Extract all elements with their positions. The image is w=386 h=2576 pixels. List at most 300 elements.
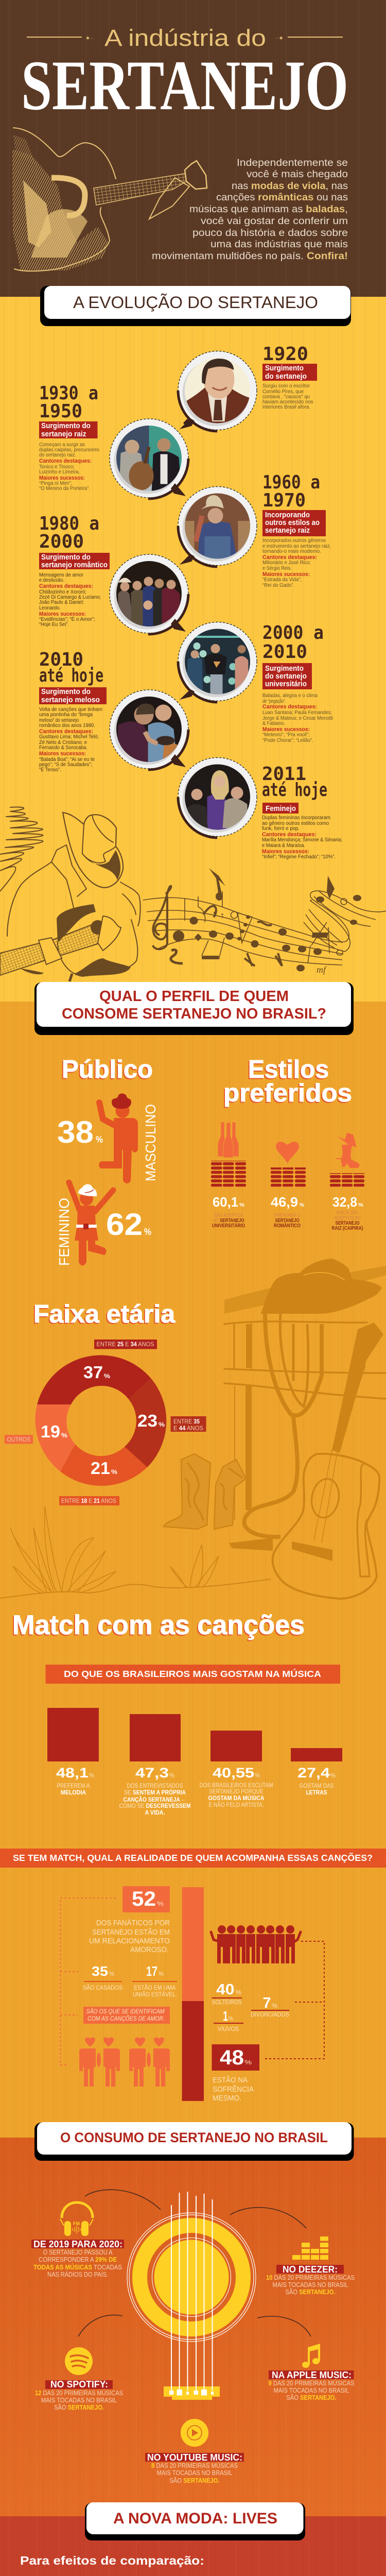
stat: 60,1%: SÃO ADEPTOS	[214, 1213, 243, 1218]
chart: stack 46,9	[271, 1167, 306, 1187]
text: 2010 até hoje: até hoje	[39, 665, 103, 686]
text: estão na sofrência: ESTÃO NA	[213, 2076, 248, 2084]
stat: 48,1%: %	[89, 1773, 94, 1779]
stat: 17%: ESTÃO EM UMA	[134, 1985, 176, 1991]
text: 1960 a 1970: outros estilos ao	[265, 519, 320, 527]
heading: a evolução do sertanejo	[40, 286, 351, 326]
heading: público: Público	[62, 1056, 153, 1083]
stat: 48,1%: PREFEREM A	[57, 1783, 90, 1789]
text: 1960 a 1970: 1960 a	[262, 472, 320, 493]
stat: 35%: SÃO CASADOS	[83, 1985, 122, 1991]
stat: 60,1%: 60,1	[213, 1194, 238, 1210]
block: rádios: CORRESPONDER A 29% DE	[39, 2256, 117, 2263]
arrow 4	[148, 594, 188, 634]
text: 2010 até hoje: “Balada Boa”; “Ai se eu te	[39, 757, 95, 762]
heading: estilos preferidos: preferidos	[222, 1080, 351, 1108]
intro text: movimentam multidões no país. Confira!	[152, 251, 348, 262]
text: 2010 até hoje	[39, 649, 107, 773]
intro text: canções românticas ou nas	[216, 192, 348, 203]
text: 1960 a 1970: Milionário e José Rico;	[262, 560, 311, 566]
chart: vertical split bar	[182, 1887, 204, 2101]
heading: faixa etária: Faixa etária	[33, 1300, 176, 1328]
text: 2010 até hoje: Volta de canções que tinham	[39, 707, 102, 713]
stat: 27,4%	[297, 1765, 336, 1796]
block: youtube music: SÃO SERTANEJO.	[170, 2477, 219, 2484]
heading: a evolução do sertanejo: A EVOLUÇÃO DO SERTANEJO	[73, 293, 318, 312]
stat: 1%: %	[229, 2016, 233, 2022]
block: spotify	[35, 2379, 123, 2411]
stat: 46,9%: SERTANEJO	[275, 1218, 300, 1224]
text: 2000 a 2010: universitário	[265, 680, 307, 688]
text: dos fanáticos: AMOROSO.	[130, 1945, 169, 1954]
heading: estilos preferidos	[222, 1056, 352, 1108]
stat: 47,3%: A VIDA.	[145, 1810, 165, 1816]
block: spotify: NO SPOTIFY:	[50, 2379, 108, 2389]
stat: 40,55%: 40,55	[213, 1765, 254, 1781]
text: 1980 a 2000: Leonardo.	[39, 605, 61, 611]
stat: 60,1%	[212, 1194, 245, 1229]
timeline circle 2000	[178, 622, 257, 701]
stat: 40,55%: SERTANEJO PORQUE	[209, 1789, 264, 1795]
stat: 47,3%: COMO SE DESCREVESSEM	[119, 1803, 190, 1809]
tag: outros: OUTROS	[7, 1437, 30, 1443]
text: 1960 a 1970: sertanejo raiz	[265, 527, 310, 535]
intro text	[152, 158, 348, 262]
text: 1920: Cornélio Pires, que	[262, 389, 304, 395]
stat: 60,1%: AO SERTANEJO	[213, 1218, 244, 1224]
text: 1930 a 1950: duplas caipiras, precursores	[39, 447, 99, 453]
stat: 60,1%: %	[239, 1202, 244, 1208]
subheading: para efeitos: Para efeitos de comparação:	[20, 2554, 204, 2567]
text: 1980 a 2000: Mensagens de amor	[39, 572, 84, 578]
heading: o consumo: O CONSUMO DE SERTANEJO NO BRASIL	[60, 2130, 328, 2145]
stat: 27,4%: %	[330, 1773, 336, 1779]
icon: apple music note	[302, 2344, 320, 2368]
intro text: músicas que animam as baladas ,	[189, 204, 348, 215]
text: 1980 a 2000: Maiores sucessos:	[39, 611, 86, 617]
text: 1930 a 1950: Começam a surgir as	[39, 442, 85, 448]
stat: 32,8%: RAIZ (CAIPIRA)	[331, 1226, 363, 1231]
stat: 1%	[214, 2008, 243, 2032]
stat: 32,8%: AINDA SÃO	[336, 1210, 359, 1216]
text: 1960 a 1970: Incorporando	[265, 511, 310, 519]
stat: 47,3%: 47,3	[135, 1765, 169, 1781]
stat: 47,3%	[119, 1765, 190, 1816]
icon: boot and hat	[336, 1133, 359, 1168]
text: dos fanáticos: DOS FANÁTICOS POR	[96, 1919, 170, 1927]
text: 1960 a 1970: Cantores destaques:	[262, 554, 317, 561]
stat: 52%: %	[157, 1901, 164, 1907]
text: 1980 a 2000: Chitãozinho e Xororó;	[39, 589, 86, 595]
heading: estilos preferidos: preferidos	[223, 1079, 352, 1107]
text: 1960 a 1970: tornando-o mais moderno.	[262, 549, 321, 554]
text: 2000 a 2010: Surgimento	[265, 665, 304, 673]
background illustration: hat, fence, rope, boots and guitar	[0, 1259, 386, 1599]
text: 1960 a 1970: “Rei do Gado”.	[262, 583, 294, 588]
chart: stack 32,8	[330, 1173, 364, 1187]
text: 2000 a 2010: 2000 a	[262, 622, 324, 643]
title: a indústria do: A indústria do	[104, 25, 266, 51]
text: 1920: do sertanejo	[265, 372, 307, 381]
block: deezer: MAIS TOCADAS NO BRASIL	[273, 2281, 348, 2289]
text: 2010 até hoje: pego”; “S de Saudades”;	[39, 762, 92, 768]
arrow 5	[178, 662, 217, 702]
arrow 3	[178, 526, 217, 567]
block: apple music	[269, 2370, 354, 2401]
text: 1920: Surgimento	[265, 364, 304, 372]
text: 2010 até hoje: Fernando & Sorocaba.	[39, 745, 87, 751]
stat: 1%: VIÚVOS	[218, 2026, 239, 2032]
stat: 38%: %	[96, 1134, 103, 1145]
text: 1960 a 1970	[262, 472, 331, 588]
stat: 47,3%: SE SENTEM A PRÓPRIA	[124, 1789, 186, 1796]
text: 2000 a 2010: “Pode Chorar”; “Leilão”.	[262, 738, 313, 743]
block: deezer: SÃO SERTANEJO.	[285, 2288, 336, 2296]
heading: match com as canções: Match com as canções	[12, 1610, 305, 1640]
text: 1960 a 1970: Incorporados outros gêneros	[262, 538, 326, 544]
text: 1980 a 2000: sertanejo romântico	[41, 561, 108, 569]
text: 1930 a 1950: Tonico e Tinoco;	[39, 464, 75, 470]
text: 2011 até hoje	[262, 764, 342, 860]
dashed connector left	[60, 1898, 116, 2065]
text: 2010 até hoje: Surgimento do	[41, 688, 91, 696]
block: rádios	[31, 2239, 124, 2278]
stat: 46,9%: ROMÂNTICO	[274, 1223, 301, 1229]
text: 2011 até hoje: Maiores sucessos:	[262, 849, 309, 855]
stat: 27,4%: LETRAS	[306, 1790, 327, 1796]
block: rádios: O SERTANEJO PASSOU A	[43, 2248, 113, 2256]
stat: 27,4%: GOSTAM DAS	[300, 1783, 334, 1789]
heading: a nova moda	[85, 2502, 305, 2540]
stat: 47,3%: CANÇÃO SERTANEJA –	[124, 1797, 185, 1803]
heading: match com as canções: Match com as canções	[11, 1611, 304, 1641]
stat: 40%: 40	[216, 1981, 235, 1998]
text: 2000 a 2010: Jorge & Mateus; e Cesar Menotti	[262, 716, 333, 721]
timeline circle 1980	[110, 554, 188, 633]
text: 1980 a 2000	[39, 513, 110, 628]
stat: 48%	[212, 2044, 259, 2071]
stat: 46,9%	[271, 1194, 304, 1229]
intro text: você vai gostar de conferir um	[201, 216, 348, 227]
stat: 60,1%: UNIVERSITÁRIO	[212, 1223, 245, 1229]
text: 1980 a 2000: Zezé Di Camargo & Luciano;	[39, 595, 101, 600]
icon: headphones: FM	[73, 2221, 80, 2226]
chart: age donut: 19	[41, 1422, 60, 1441]
intro text: Independentemente se	[237, 158, 348, 168]
banner: do que os brasileiros: DO QUE OS BRASILEIROS MAIS GOSTAM NA MÚSICA	[64, 1668, 321, 1679]
arrow 6	[148, 730, 188, 770]
stat: 48,1%: 48,1	[56, 1765, 89, 1781]
heading: estilos preferidos: Estilos	[247, 1057, 328, 1084]
timeline circle 2010	[110, 690, 188, 769]
title: a indústria do: ··★	[275, 36, 284, 41]
text: 1930 a 1950: Surgimento do	[41, 422, 91, 430]
text: estão na sofrência	[213, 2076, 254, 2103]
block: spotify: MAIS TOCADAS NO BRASIL	[41, 2396, 117, 2404]
icon: deezer bars	[292, 2236, 328, 2260]
text: 2010 até hoje: meloso” do sertanejo	[39, 718, 79, 723]
intro text: pouco da história e dados sobre	[192, 228, 348, 239]
block: youtube music	[145, 2452, 244, 2484]
text: 2000 a 2010: Baladas, alegria e o clima	[262, 693, 318, 699]
text: 1920: contava , "causos" qu	[262, 394, 310, 400]
block: deezer	[266, 2264, 355, 2296]
stat: 46,9%: %	[300, 1202, 304, 1208]
block: rádios: DE 2019 PARA 2020:	[33, 2239, 122, 2249]
label: feminino: FEMININO	[56, 1198, 72, 1266]
stat: 7%: 7	[262, 1995, 271, 2011]
text: 1930 a 1950: 1950	[39, 401, 82, 422]
text: 1980 a 2000: “Evidências”; “É o Amor”;	[39, 617, 95, 622]
icon: music staff and notes: mf	[317, 964, 327, 975]
stat: 17%: UNIÃO ESTÁVEL.	[133, 1991, 177, 1998]
block: youtube music: 8 DAS 20 PRIMEIRAS MÚSICAS	[151, 2462, 238, 2469]
text: 2011 até hoje: e Maiara & Maraísa.	[262, 843, 305, 849]
stat: 47,3%: %	[169, 1773, 174, 1779]
title: a indústria do	[27, 25, 343, 51]
stat: 40,55%: GOSTAM DA MÚSICA	[208, 1795, 265, 1802]
text: 1960 a 1970: e instrumento ao sertanejo raiz,	[262, 544, 331, 549]
text: 1980 a 2000: e desilusão.	[39, 578, 64, 583]
block: apple music: SÃO SERTANEJO.	[286, 2394, 337, 2401]
block: apple music: NA APPLE MUSIC:	[272, 2370, 352, 2380]
dashed connector right	[263, 1941, 324, 2059]
text: 2000 a 2010: Maiores sucessos:	[262, 726, 310, 733]
text: 2011 até hoje: Duplas femininas Incorporaram	[262, 815, 330, 821]
heading: perfil	[34, 982, 354, 1035]
stat: 40,55%: DOS BRASILEIROS ESCUTAM	[200, 1783, 273, 1789]
text: 2011 até hoje: ao gênero outros estilos como	[262, 821, 329, 826]
text: 1920: haviam acontecido nos	[262, 399, 313, 405]
text: 1930 a 1950: 1930 a	[39, 383, 98, 404]
stat: 40,55%	[200, 1765, 273, 1808]
banner: do que os brasileiros	[45, 1665, 340, 1684]
text: 2010 até hoje: Gusttavo Lima; Michel Teló;	[39, 734, 99, 740]
text: estão na sofrência: SOFRÊNCIA	[213, 2085, 254, 2094]
chart: stack 60,1	[211, 1161, 246, 1187]
text: 1960 a 1970: e Sérgio Reis.	[262, 566, 292, 571]
stat: 35%	[83, 1963, 122, 1991]
stat: 17%	[132, 1963, 177, 1998]
icon: spotify	[65, 2347, 93, 2375]
tag: outros	[5, 1435, 33, 1444]
chart: age donut: 21	[91, 1459, 110, 1478]
stat: 32,8%: %	[358, 1202, 363, 1208]
text: dos fanáticos	[89, 1919, 170, 1954]
tag: 18 a 21	[59, 1496, 119, 1505]
block: deezer: 10 DAS 20 PRIMEIRAS MÚSICAS	[266, 2274, 355, 2281]
text: 1980 a 2000: Cantores destaques:	[39, 583, 93, 589]
icon: man	[99, 1093, 138, 1183]
stat: 32,8%: 32,8	[332, 1194, 357, 1210]
text: estão na sofrência: MESMO.	[213, 2094, 241, 2103]
text: 1930 a 1950: Luizinho e Limeira.	[39, 469, 80, 475]
stat: 48%: 48	[220, 2046, 244, 2069]
text: dos fanáticos: SERTANEJO ESTÃO EM	[92, 1928, 170, 1937]
stat: 38%: 38	[57, 1115, 94, 1149]
timeline circle 1920	[178, 351, 257, 430]
stat: 62%: %	[144, 1227, 151, 1237]
title: a indústria do: ★··	[85, 36, 94, 41]
text: 2010 até hoje: 2010	[39, 649, 83, 670]
stat: 7%: %	[272, 2003, 277, 2009]
stat: 17%: %	[159, 1971, 164, 1977]
label: masculino: MASCULINO	[143, 1104, 159, 1181]
stat: 7%: DIVORCIADOS	[251, 2012, 289, 2018]
text: 2011 até hoje: 2011	[262, 764, 306, 785]
stat: 62%: 62	[106, 1207, 143, 1242]
stat: 32,8%: ADEPTOS AO	[335, 1215, 361, 1221]
icon: couples with hearts	[79, 2038, 170, 2087]
stat: 52%: 52	[132, 1888, 156, 1910]
text: 2000 a 2010: & Fabiano.	[262, 721, 285, 726]
text: 2000 a 2010: Cantores destaques:	[262, 704, 317, 710]
text: 2000 a 2010	[262, 622, 333, 743]
text: 2011 até hoje: até hoje	[262, 779, 327, 801]
chart: age donut: %	[61, 1432, 67, 1439]
text: 2011 até hoje: Marília Mendonça; Simone & Simaria;	[262, 837, 342, 843]
heading: perfil: QUAL O PERFIL DE QUEM	[99, 988, 289, 1005]
tag: 35 a 44	[171, 1416, 206, 1432]
text: 2000 a 2010: do sertanejo	[265, 672, 307, 681]
text: 2010 até hoje: romântico dos anos 1980.	[39, 723, 95, 728]
text: 1980 a 2000: 2000	[39, 531, 84, 552]
block: spotify: SÃO SERTANEJO.	[54, 2403, 104, 2411]
chart: age donut: %	[104, 1372, 110, 1380]
text: 1920: Surgiu com o escritor	[262, 383, 310, 389]
text: 1920: interiores Brasil afora.	[262, 404, 310, 410]
icon: group of people	[211, 1925, 301, 1963]
text: 2010 até hoje: sertanejo meloso	[41, 696, 100, 704]
chart: bars	[47, 1708, 342, 1761]
text: 2000 a 2010: Luan Santana; Paula Fernandes;	[262, 710, 332, 716]
block: rádios: TODAS AS MÚSICAS TOCADAS	[33, 2263, 122, 2271]
stat: 48,1%	[56, 1765, 94, 1796]
stat: 40%	[212, 1981, 242, 2006]
chart: age donut: %	[159, 1421, 165, 1428]
text: 1930 a 1950	[39, 383, 99, 492]
callout: canções de amor: COM AS CANÇÕES DE AMOR.	[87, 2015, 165, 2022]
text: 2010 até hoje: Cantores destaques:	[39, 728, 93, 735]
block: apple music: 9 DAS 20 PRIMEIRAS MÚSICAS	[269, 2379, 354, 2387]
text: 2010 até hoje: “É Tenso”.	[39, 767, 61, 773]
text: 1980 a 2000: “Hoje Eu Sei”.	[39, 622, 69, 628]
text: 2011 até hoje: “Infiel”; “Regime Fechado”; “10%”.	[262, 854, 336, 860]
block: youtube music: MAIS TOCADAS NO BRASIL	[156, 2469, 233, 2477]
text: 1930 a 1950: Cantores destaques:	[39, 458, 92, 464]
text: 1920	[262, 344, 317, 410]
text: 1960 a 1970: Maiores sucessos:	[262, 571, 310, 578]
text: 1930 a 1950: sertanejo raiz	[41, 430, 86, 438]
tag: 35 a 44: ENTRE 35	[173, 1419, 200, 1425]
text: 1980 a 2000: Surgimento do	[41, 553, 91, 562]
text: 1920: 1920	[262, 344, 308, 365]
stat: 46,9%: PREFEREM O	[274, 1213, 301, 1218]
heading: a nova moda: A NOVA MODA: LIVES	[113, 2510, 277, 2527]
intro text: você é mais chegado	[247, 169, 348, 180]
heading: estilos preferidos: Estilos	[248, 1056, 329, 1083]
icon: heart	[276, 1142, 299, 1163]
stat: 40%: SOLTEIROS	[212, 1999, 242, 2006]
text: 1980 a 2000: 1980 a	[39, 513, 99, 534]
icon: headphones	[60, 2202, 93, 2236]
text: 2010 até hoje: Zé Neto & Cristiano; e	[39, 740, 87, 745]
stat: 32,8%: SERTANEJO	[336, 1221, 360, 1226]
tag: 35 a 44: E 44 ANOS	[173, 1426, 203, 1432]
callout: canções de amor	[83, 2007, 170, 2024]
icon: guitar illustration	[12, 128, 207, 271]
stat: 35%: 35	[92, 1963, 108, 1979]
icon: cowboy with guitar	[0, 807, 141, 981]
timeline circle 1960	[178, 486, 257, 566]
tag: 25 a 34: ENTRE 25 E 34 ANOS	[97, 1342, 154, 1348]
text: 2000 a 2010: de “pegação”.	[262, 699, 286, 704]
icon: music staff and notes	[143, 868, 386, 975]
text: 2010 até hoje: Maiores sucessos:	[39, 751, 86, 757]
text: 2000 a 2010: 2010	[262, 641, 307, 663]
text: 1930 a 1950: Maiores sucessos:	[39, 475, 85, 481]
decorative arcs	[78, 2190, 311, 2336]
arrow 1	[178, 391, 217, 431]
text: 1930 a 1950: do sertanejo raiz.	[39, 452, 76, 458]
stat: 17%: 17	[146, 1963, 157, 1979]
icon: woman	[69, 1182, 113, 1265]
text: 2010 até hoje: uma pontinha do “brega	[39, 712, 93, 718]
stat: 48,1%: MELODIA	[61, 1790, 86, 1796]
heading: o consumo	[34, 2122, 354, 2161]
text: 1960 a 1970: 1970	[262, 490, 306, 511]
block: rádios: NAS RÁDIOS DO PAÍS.	[47, 2270, 108, 2278]
chart: age donut: 23	[137, 1411, 157, 1430]
stat: 48%: %	[244, 2060, 252, 2066]
banner: se tem match: SE TEM MATCH, QUAL A REALIDADE DE QUEM ACOMPANHA ESSAS CANÇÕES?	[13, 1852, 373, 1863]
heading: público: Público	[61, 1057, 152, 1084]
callout: canções de amor: SÃO OS QUE SE IDENTIFICAM	[86, 2008, 165, 2015]
text: 1930 a 1950: “O Menino da Porteira”.	[39, 486, 90, 492]
block: spotify: 12 DAS 20 PRIMEIRAS MÚSICAS	[35, 2389, 123, 2397]
chart: age donut	[36, 1355, 166, 1486]
stat: 40%: %	[236, 1990, 241, 1996]
block: apple music: MAIS TOCADAS NO BRASIL	[274, 2386, 349, 2394]
heading: perfil: CONSOME SERTANEJO NO BRASIL?	[62, 1006, 326, 1022]
tag: 25 a 34	[94, 1340, 157, 1349]
stat: 32,8%	[331, 1194, 363, 1231]
chart: age donut: 37	[83, 1363, 103, 1382]
stat: 1%: 1	[223, 2008, 228, 2024]
text: 1980 a 2000: João Paulo & Daniel;	[39, 600, 84, 605]
chart: age donut: %	[111, 1468, 117, 1476]
icon: guitar sound hole and strings	[127, 2192, 256, 2400]
banner: se tem match	[0, 1849, 386, 1868]
intro text: uma das indústrias que mais	[210, 239, 348, 250]
text: 2011 até hoje: funk, forró e pop.	[262, 826, 300, 832]
text: 1930 a 1950: “Pinga ni Mim”;	[39, 481, 72, 486]
stat: 7%	[251, 1995, 289, 2018]
timeline circle 2011	[178, 757, 257, 837]
block: deezer: NO DEEZER:	[283, 2264, 338, 2275]
icon: bottles	[218, 1122, 239, 1158]
stat: 40,55%: %	[255, 1773, 260, 1779]
heading: faixa etária: Faixa etária	[32, 1301, 174, 1329]
intro text: nas modas de viola , nas	[232, 181, 348, 192]
stat: 46,9%: 46,9	[271, 1194, 298, 1210]
text: 2000 a 2010: “Meteoro”; “Pra você”;	[262, 732, 310, 738]
arc 7	[178, 797, 217, 838]
arrow 2	[148, 459, 188, 499]
timeline circle 1930	[110, 419, 188, 498]
block: youtube music: NO YOUTUBE MUSIC:	[147, 2452, 242, 2463]
text: 2011 até hoje: Feminejo	[266, 805, 296, 813]
